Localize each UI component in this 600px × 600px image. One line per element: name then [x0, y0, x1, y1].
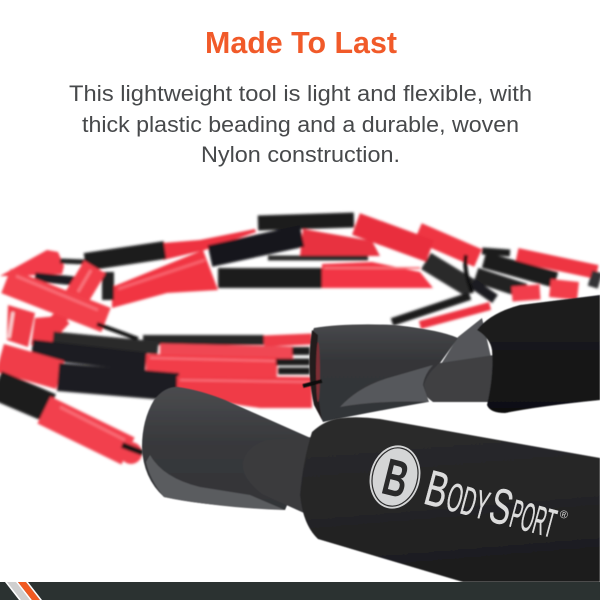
beaded jump rope — [0, 220, 600, 464]
brand wordmark — [419, 460, 573, 551]
cone — [142, 387, 315, 510]
description text: This lightweight tool is light and flexible, with — [69, 81, 532, 106]
brand wordmark: B — [419, 460, 455, 519]
logo badge: B — [377, 448, 414, 510]
footer stripes — [5, 582, 32, 600]
brand logo — [363, 440, 573, 551]
cone light facet — [146, 455, 285, 510]
logo badge — [363, 440, 427, 514]
description text — [69, 81, 532, 167]
middle row beads — [0, 338, 312, 464]
back handle — [303, 295, 600, 422]
brand wordmark: ODY — [442, 475, 494, 529]
foam grip — [477, 295, 600, 413]
cone end — [309, 330, 322, 420]
brand wordmark: S — [484, 477, 519, 536]
back row beads — [0, 220, 600, 325]
cone light facet — [340, 365, 433, 407]
lower shaft — [422, 355, 494, 402]
title: Made To Last — [205, 25, 397, 60]
shaft — [243, 437, 314, 513]
brand wordmark: ® — [558, 508, 569, 522]
description text: thick plastic beading and a durable, woven — [82, 112, 519, 137]
upper shaft — [436, 318, 494, 372]
cone — [310, 324, 458, 422]
footer bar — [0, 582, 600, 600]
front handle — [142, 387, 600, 582]
description text: Nylon construction. — [201, 142, 400, 167]
left side beads — [6, 276, 138, 347]
foam grip — [300, 417, 600, 582]
